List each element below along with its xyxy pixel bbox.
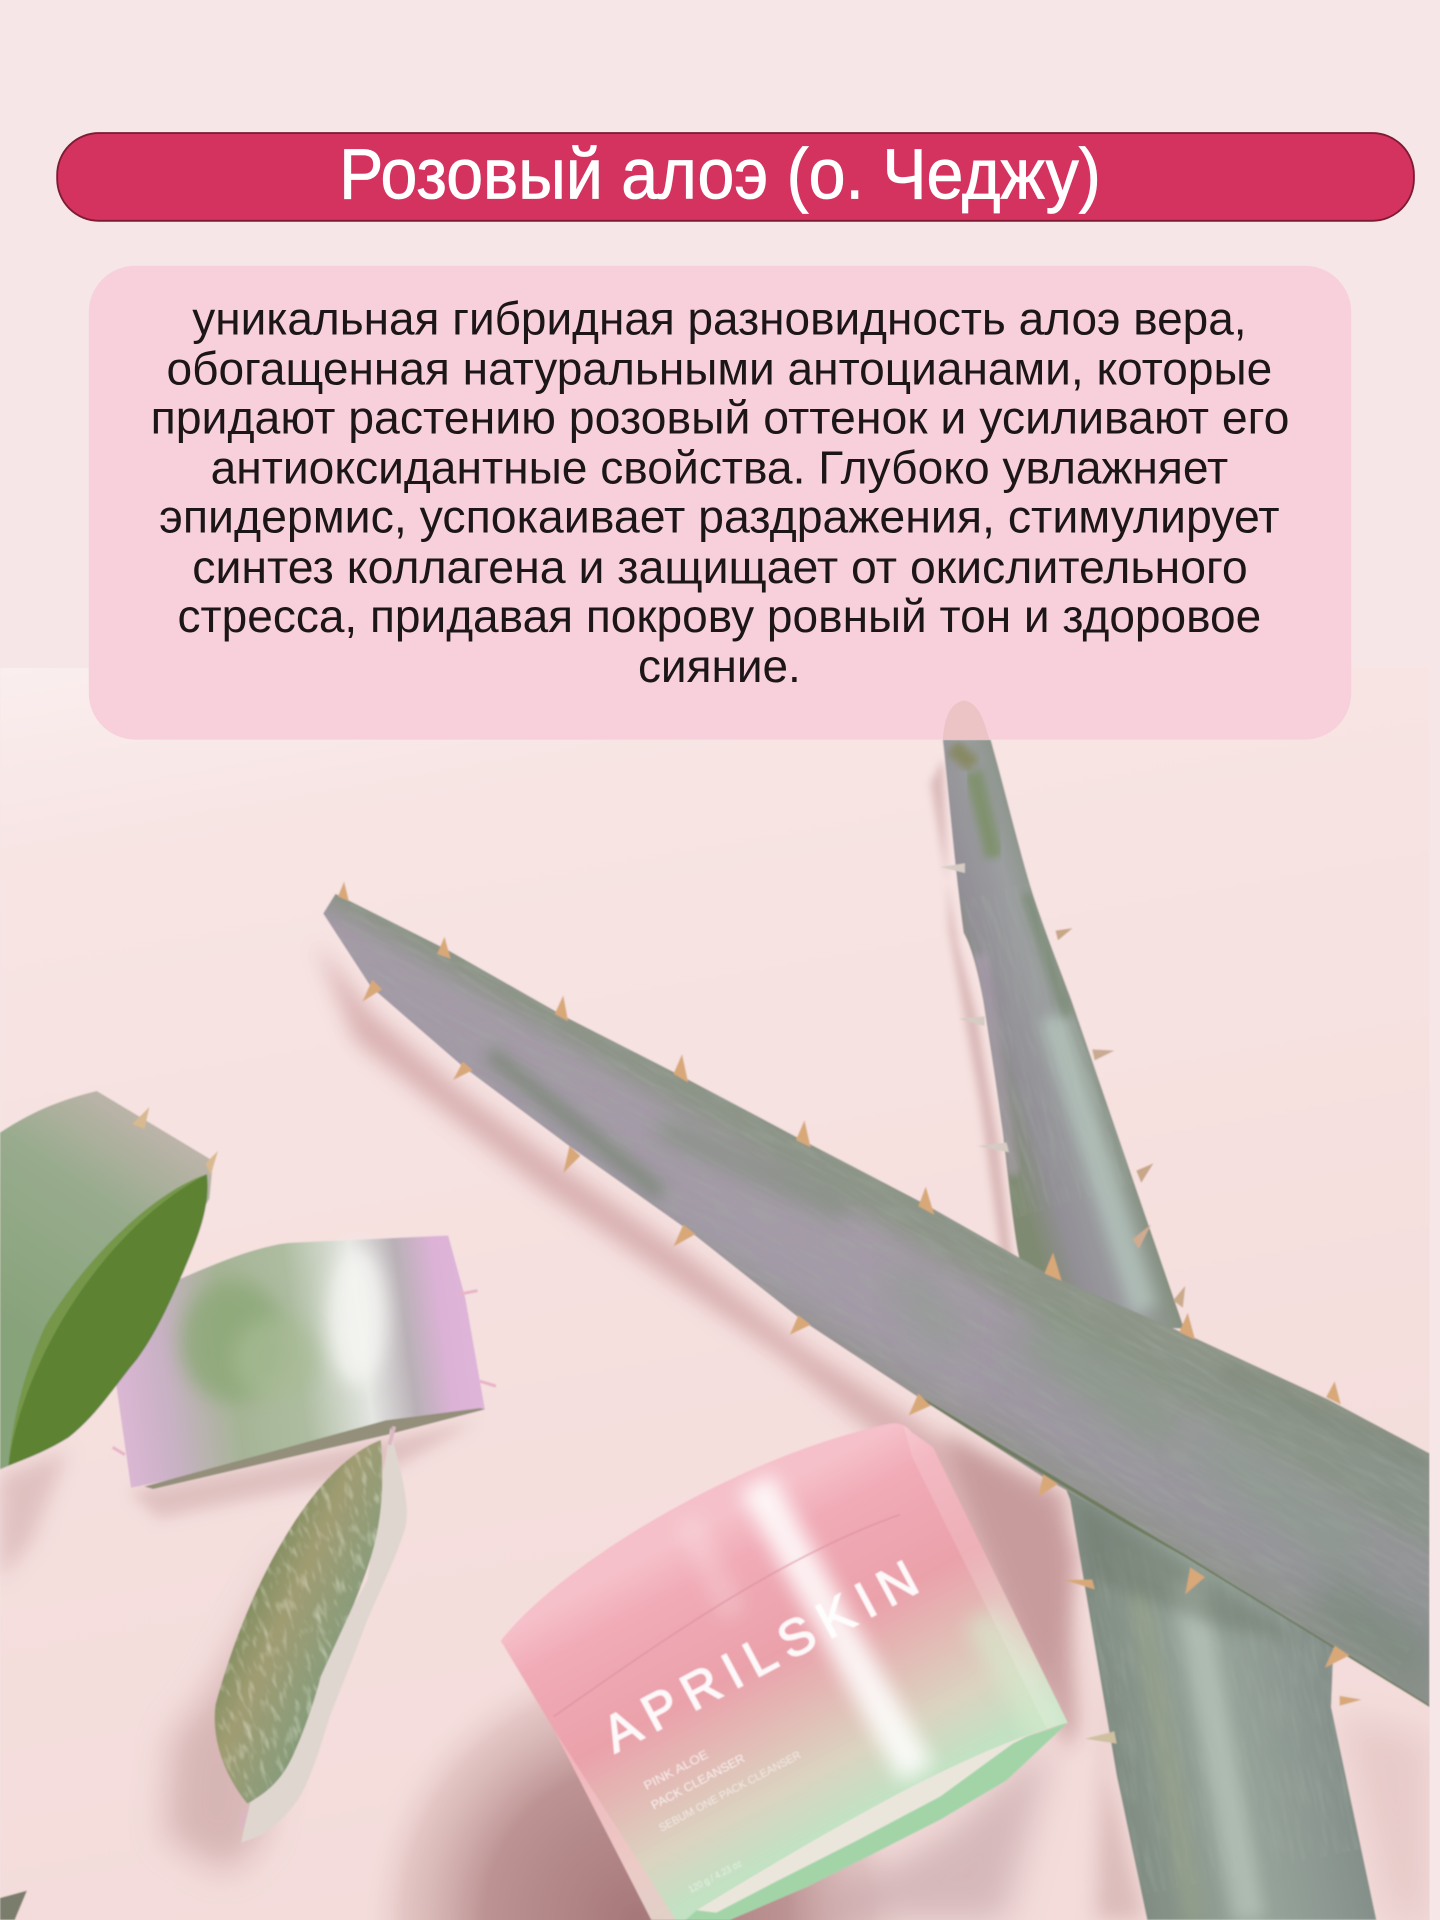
jar brand text: PACK CLEANSER [649,1751,747,1812]
description text: уникальная гибридная разновидность алоэ вера, [192,292,1247,344]
description text: сияние. [638,640,801,692]
jar brand text [593,1549,927,1896]
title text: Розовый алоэ (о. Чеджу) [339,135,1101,214]
description text: обогащенная натуральными антоцианами, которые [167,342,1272,394]
description panel [89,266,1351,740]
description text [151,292,1289,692]
cut aloe piece, pink and silver [113,1236,496,1489]
photo: pink aloe leaves and product jar [0,661,1440,1920]
description text: эпидермис, успокаивает раздражения, стимулирует [159,491,1280,543]
description text: антиоксидантные свойства. Глубоко увлажняет [211,442,1228,494]
description text: стресса, придавая покрову ровный тон и здоровое [178,590,1261,642]
description text: синтез коллагена и защищает от окислительного [192,541,1248,593]
aloe leaf diagonal [322,894,1430,1708]
photo shadows [0,759,1429,1920]
aloe leaf vertical upper part [942,740,1184,1330]
cut aloe piece, green [0,1091,218,1469]
description text: придают растению розовый оттенок и усиливают его [151,391,1289,443]
jar brand text: SEBUM ONE PACK CLEANSER [657,1749,803,1834]
title pill [57,133,1414,221]
aloe leaf vertical lower part [1066,1490,1377,1920]
jar brand text: 120 g / 4.23 oz [687,1858,744,1896]
aloe gel slice [90,1390,523,1867]
product jar [490,1423,1068,1920]
jar brand text: PINK ALOE [641,1747,711,1793]
jar brand text: APRILSKIN [593,1549,927,1763]
aloe spines [0,863,1362,1920]
aloe tip seen through panel [943,700,989,740]
